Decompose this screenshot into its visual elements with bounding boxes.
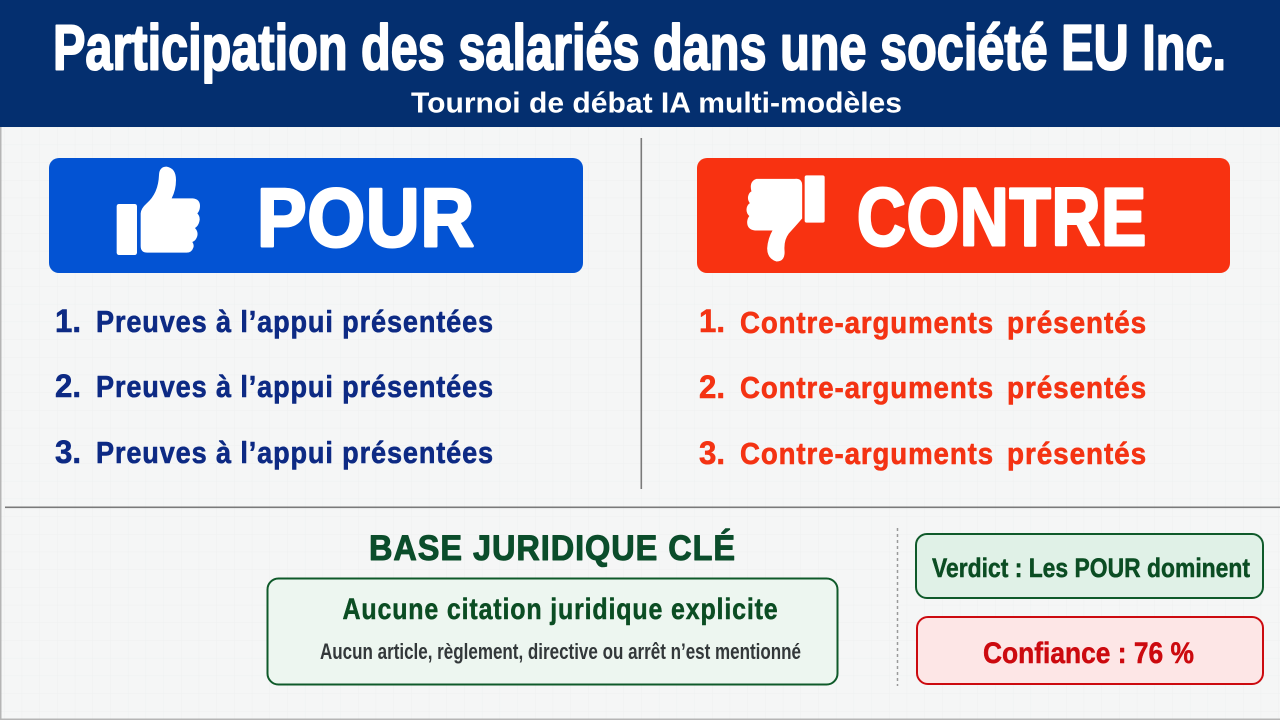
CONTRE item 2: 2.	[699, 369, 725, 405]
callout: confidence	[917, 617, 1263, 684]
list: POUR arguments	[55, 303, 494, 470]
callout: verdict	[916, 534, 1263, 598]
POUR item 2: 2.	[55, 368, 81, 404]
POUR item 3: Preuves à l’appui présentées	[96, 435, 494, 470]
CONTRE item 2: Contre-arguments	[740, 370, 994, 405]
POUR item 3: 3.	[55, 434, 81, 470]
panel: legal basis	[268, 578, 838, 684]
CONTRE item 1: Contre-arguments	[740, 305, 994, 340]
POUR label: POUR	[257, 171, 475, 264]
CONTRE item 3: présentés	[1007, 436, 1147, 471]
panel: CONTRE	[697, 158, 1230, 273]
CONTRE item 1: 1.	[699, 303, 725, 339]
icon: thumbs up	[117, 167, 200, 255]
POUR item 1: Preuves à l’appui présentées	[96, 304, 494, 339]
CONTRE item 2: présentés	[1007, 370, 1147, 405]
POUR item 2: Preuves à l’appui présentées	[96, 369, 494, 404]
CONTRE item 1: présentés	[1007, 305, 1147, 340]
list: CONTRE arguments	[699, 303, 1147, 471]
POUR item 1: 1.	[55, 303, 81, 339]
CONTRE item 3: Contre-arguments	[740, 436, 994, 471]
dashed divider	[896, 528, 898, 686]
subtitle: Tournoi de débat IA multi-modèles	[411, 88, 902, 120]
CONTRE item 3: 3.	[699, 435, 725, 471]
heading: base juridique: BASE JURIDIQUE CLÉ	[369, 528, 736, 568]
icon: thumbs down	[747, 175, 825, 261]
legal basis note: Aucun article, règlement, directive ou arrêt n’est mentionné	[320, 639, 801, 664]
legal basis heading: Aucune citation juridique explicite	[342, 593, 778, 626]
vertical divider	[640, 138, 642, 489]
CONTRE item 3	[699, 435, 1147, 471]
horizontal divider	[5, 506, 1280, 508]
callout: confidence: Confiance : 76 %	[983, 637, 1194, 670]
header banner	[0, 0, 1280, 127]
CONTRE item 1	[699, 303, 1147, 340]
CONTRE label: CONTRE	[857, 172, 1147, 263]
panel: POUR	[49, 158, 583, 273]
CONTRE item 2	[699, 369, 1147, 405]
